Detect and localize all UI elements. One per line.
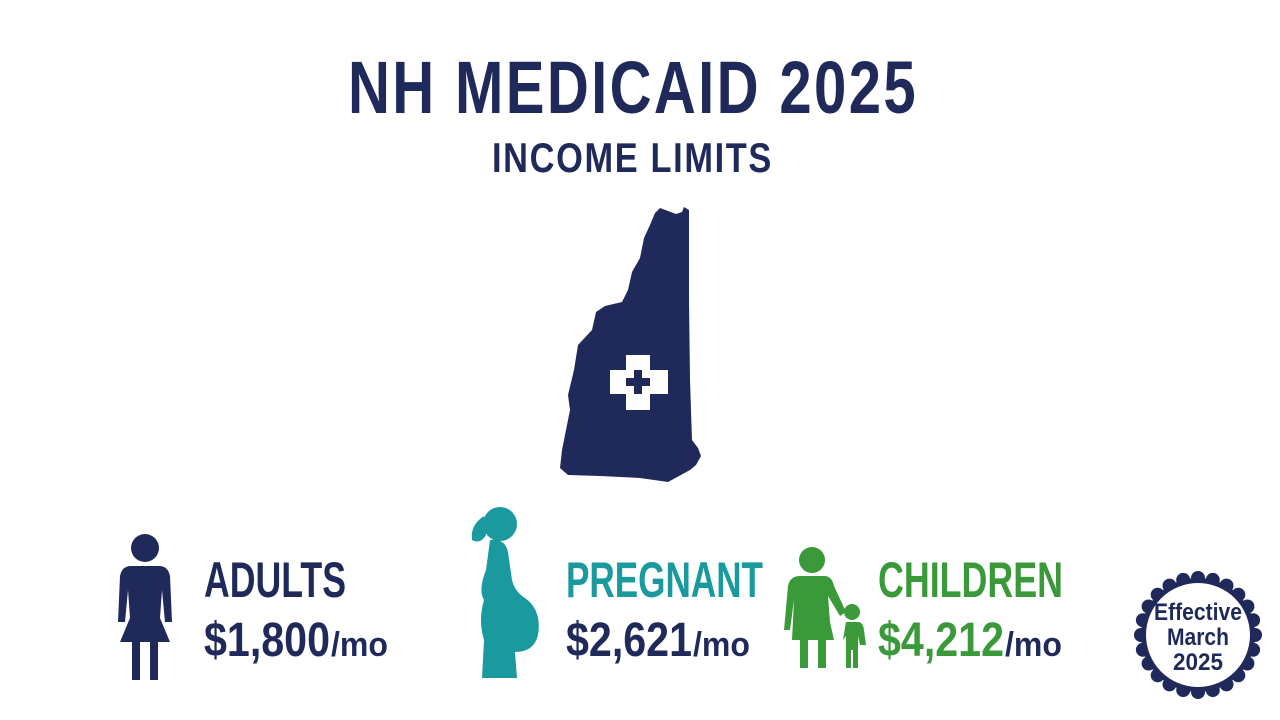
map: New Hampshire with medical cross xyxy=(560,207,701,482)
label: pregnant xyxy=(566,552,763,667)
label: pregnant: PREGNANT xyxy=(566,552,763,608)
subtitle: INCOME LIMITS xyxy=(492,134,773,181)
label: adults: $1,800 xyxy=(204,614,330,667)
title: NH MEDICAID 2025 xyxy=(348,46,918,129)
label: adults: /mo xyxy=(331,626,388,664)
badge: effective march 2025: March xyxy=(1167,624,1229,651)
label: children xyxy=(878,552,1063,667)
icon: adult woman xyxy=(118,534,172,680)
label: children: /mo xyxy=(1005,626,1062,664)
label: pregnant: /mo xyxy=(693,626,750,664)
label: children: $4,212 xyxy=(878,614,1004,667)
icon: pregnant woman xyxy=(472,507,539,678)
label: children: CHILDREN xyxy=(878,552,1063,608)
badge: effective march 2025: 2025 xyxy=(1173,649,1223,676)
label: adults: ADULTS xyxy=(204,552,346,608)
badge: effective march 2025 xyxy=(1134,571,1262,699)
label: pregnant: $2,621 xyxy=(566,614,692,667)
badge: effective march 2025: Effective xyxy=(1154,599,1242,626)
icon: parent and child xyxy=(784,547,866,668)
label: adults xyxy=(204,552,388,667)
